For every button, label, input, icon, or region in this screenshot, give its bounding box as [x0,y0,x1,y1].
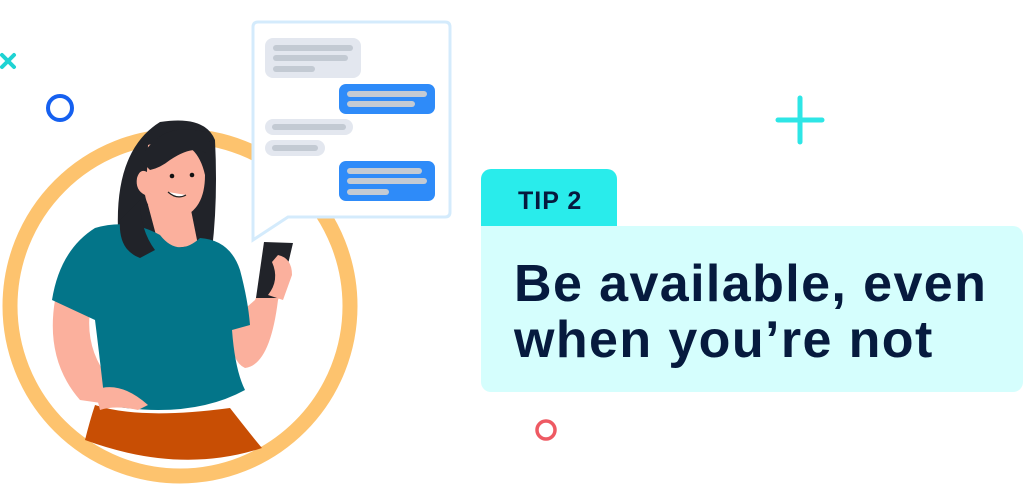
woman [52,120,293,460]
icon: red ring [537,421,555,439]
face [137,141,205,219]
message 1 [265,38,361,78]
icon: blue ring [48,96,72,120]
hair front [140,129,212,170]
headline text: when you’re not [514,311,934,369]
icon: teal plus [778,98,822,142]
tip tab [481,169,617,227]
tip tab: TIP 2 [518,187,582,215]
right forearm [231,255,290,368]
message 3 [265,119,353,135]
speech bubble [253,22,450,240]
phone [256,242,293,298]
icon: teal cross [2,55,14,67]
shirt [52,224,250,410]
hand on phone [268,255,292,300]
headline panel [481,226,1023,392]
arm left [53,300,115,405]
headline text: Be available, even [514,255,987,313]
orange ring [10,136,350,476]
eyes/smile [170,174,174,178]
hand on hip [95,387,148,410]
hair back [118,120,216,262]
message 5 [339,161,435,201]
headline text [514,255,987,369]
message 2 [339,84,435,114]
pants [85,405,262,460]
message 4 [265,140,325,156]
neck [148,205,198,250]
